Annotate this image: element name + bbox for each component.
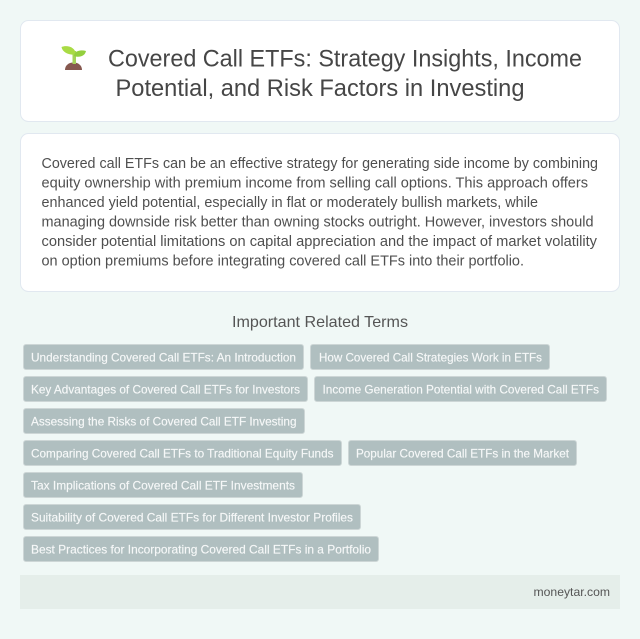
tag: popular: Popular Covered Call ETFs in the Market <box>356 446 570 460</box>
panel: summary paragraph <box>20 134 620 292</box>
footer <box>20 575 620 609</box>
tag: how strategies work <box>310 344 550 370</box>
tag: how strategies work: How Covered Call Strategies Work in ETFs <box>319 350 542 364</box>
tag: comparing: Comparing Covered Call ETFs to Traditional Equity Funds <box>31 446 334 460</box>
text block: summary <box>42 156 598 270</box>
heading: related terms: Important Related Terms <box>232 314 408 331</box>
tag: understanding: Understanding Covered Call ETFs: An Introduction <box>31 350 296 364</box>
text block: summary: equity ownership with premium income from selling call options. This approach offers <box>42 176 588 192</box>
text block: summary: Covered call ETFs can be an effective strategy for generating side income by combining <box>42 156 598 172</box>
text block: summary: on option premiums before integrating covered call ETFs into their portfolio. <box>42 254 524 270</box>
tag: tax implications <box>24 472 302 498</box>
text block: summary: consider potential limitations on capital appreciation and the impact of market volatility <box>42 234 598 250</box>
tag: suitability: Suitability of Covered Call ETFs for Different Investor Profiles <box>31 510 353 524</box>
text block: summary: enhanced yield potential, especially in flat or moderately bullish markets, while <box>42 195 538 211</box>
title: Covered Call ETFs: Strategy Insights, Income <box>108 46 582 72</box>
tag: understanding <box>24 344 304 370</box>
tag: assessing risks <box>24 408 304 434</box>
tag: popular <box>348 440 576 466</box>
tag: income generation: Income Generation Potential with Covered Call ETFs <box>322 382 599 396</box>
title <box>108 46 582 102</box>
tag: tax implications: Tax Implications of Covered Call ETF Investments <box>31 478 295 492</box>
icon: seedling <box>62 46 86 70</box>
tag: key advantages <box>24 376 308 402</box>
tag: key advantages: Key Advantages of Covered Call ETFs for Investors <box>31 382 300 396</box>
panel: title header <box>20 20 620 122</box>
tag: suitability <box>24 504 360 530</box>
tag: assessing risks: Assessing the Risks of Covered Call ETF Investing <box>31 414 296 428</box>
tag: best practices <box>24 536 378 562</box>
footer: moneytar.com <box>534 585 610 599</box>
title: Potential, and Risk Factors in Investing <box>116 75 524 102</box>
text block: summary: managing downside risk better than owning stocks outright. However, investors should <box>42 214 594 230</box>
panel: related term tags <box>24 344 606 562</box>
tag: comparing <box>24 440 342 466</box>
tag: income generation <box>314 376 606 402</box>
tag: best practices: Best Practices for Incorporating Covered Call ETFs in a Portfolio <box>31 542 371 556</box>
